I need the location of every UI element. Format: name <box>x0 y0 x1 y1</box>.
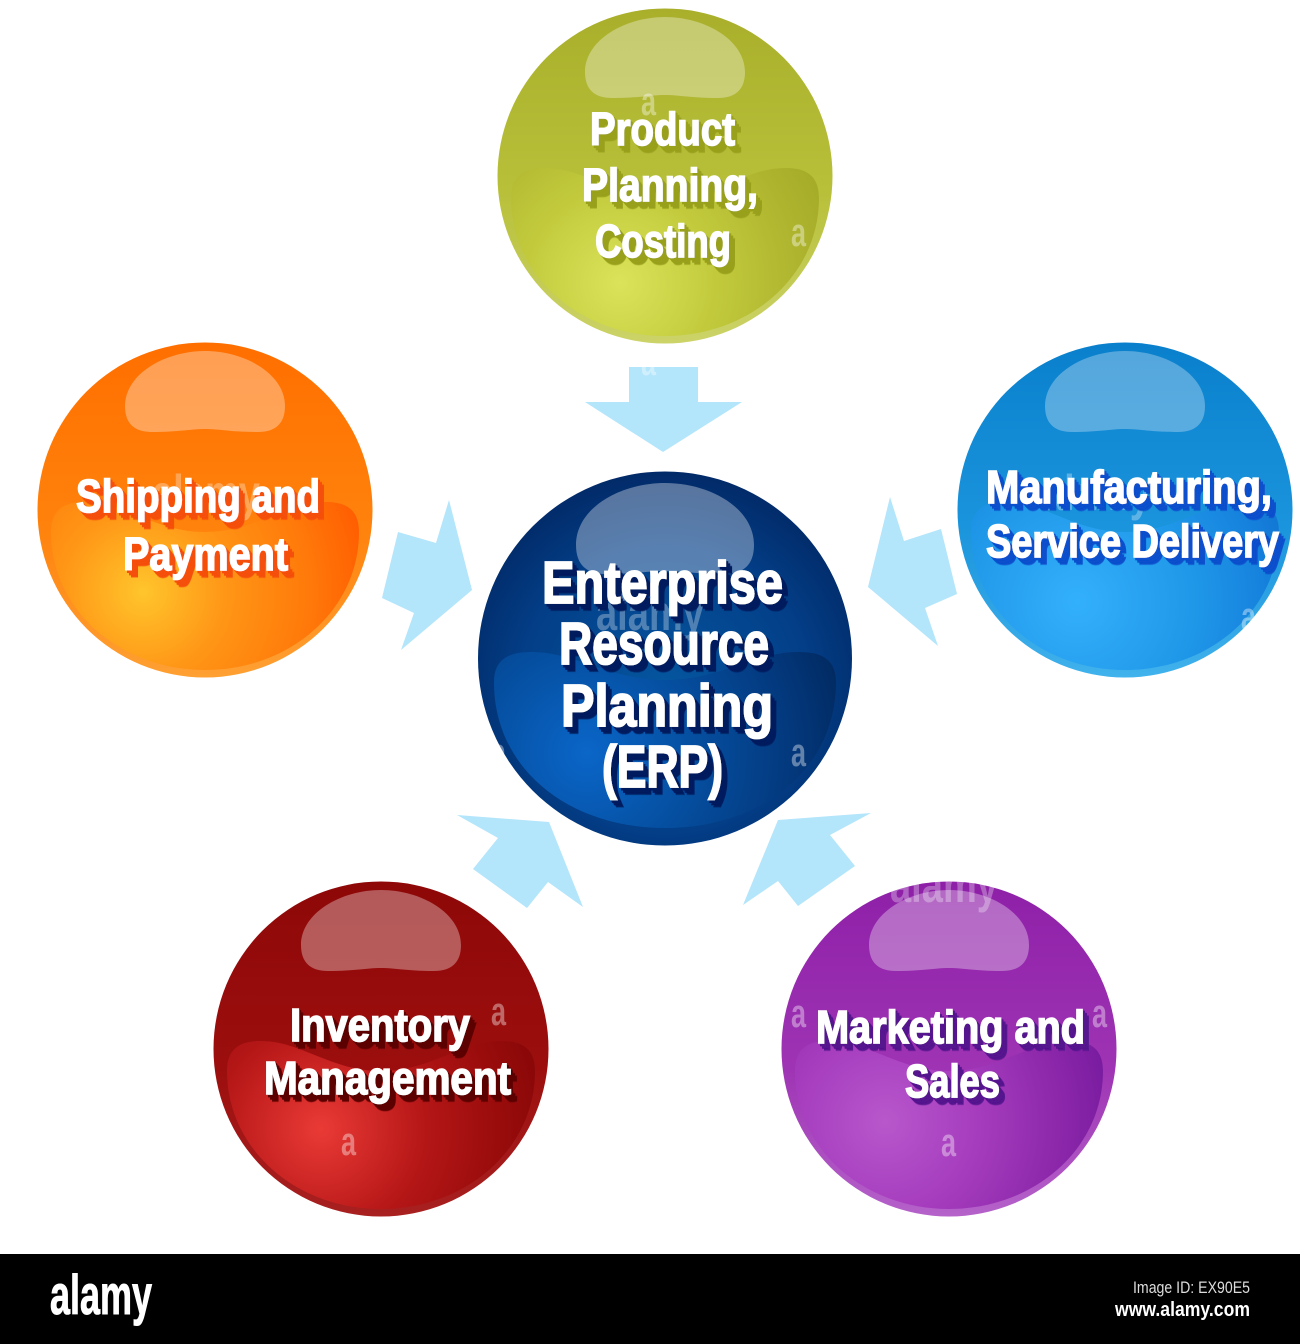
website: www.alamy.com <box>1114 1299 1250 1321</box>
node: Inventory Management: a <box>341 1120 357 1164</box>
label <box>816 1001 1085 1107</box>
node: Shipping and Payment <box>38 342 372 678</box>
label: Payment <box>123 528 288 580</box>
node: Manufacturing, Service Delivery: alamy <box>1043 465 1151 521</box>
label: Shipping and <box>76 470 320 522</box>
node: Product Planning, Costing <box>498 8 832 344</box>
node: Marketing and Sales: alamy <box>890 857 998 913</box>
label: Sales <box>905 1055 1000 1107</box>
node: Enterprise Resource Planning (ERP): a <box>491 731 507 775</box>
node: Inventory Management <box>214 882 548 1216</box>
label: Product <box>590 103 735 155</box>
arrow: top to centre <box>585 367 742 452</box>
label: Planning, <box>582 159 758 211</box>
node: Inventory Management: a <box>491 990 507 1034</box>
label: (ERP) <box>602 734 723 800</box>
arrow: bottom left to centre <box>457 815 583 908</box>
node: Marketing and Sales: a <box>791 992 807 1036</box>
label <box>986 461 1279 567</box>
label: Planning <box>561 673 773 739</box>
node: Manufacturing, Service Delivery: a <box>1241 595 1257 639</box>
label: Inventory <box>290 999 470 1051</box>
footer logo: alamy <box>50 1263 152 1326</box>
arrow: left to centre <box>382 500 472 650</box>
node: Enterprise Resource Planning (ERP): a <box>791 731 807 775</box>
label: Costing <box>595 215 731 267</box>
node: Product Planning, Costing: a <box>641 80 657 124</box>
label <box>264 999 511 1104</box>
label: Resource <box>559 611 769 677</box>
node: Shipping and Payment: alamy <box>152 465 260 521</box>
node: Enterprise Resource Planning (ERP) <box>478 472 852 846</box>
label <box>582 103 758 267</box>
footer bar <box>0 1254 1300 1344</box>
label <box>76 470 320 580</box>
node: Product Planning, Costing: a <box>791 211 807 255</box>
label: Management <box>264 1052 511 1104</box>
node: Marketing and Sales: a <box>1092 992 1108 1036</box>
label: Enterprise <box>542 550 783 616</box>
label <box>542 550 783 800</box>
label: Marketing and <box>816 1001 1085 1053</box>
node: Marketing and Sales <box>782 857 1116 1216</box>
node: Manufacturing, Service Delivery <box>958 342 1292 678</box>
arrow: right to centre <box>868 497 957 646</box>
node: Enterprise Resource Planning (ERP): alamy <box>596 585 704 641</box>
image id: Image ID: EX90E5 <box>1133 1278 1250 1297</box>
node: Marketing and Sales: a <box>941 1121 957 1165</box>
arrow: bottom right to centre <box>743 813 871 906</box>
watermark on top arrow: a <box>641 340 657 384</box>
